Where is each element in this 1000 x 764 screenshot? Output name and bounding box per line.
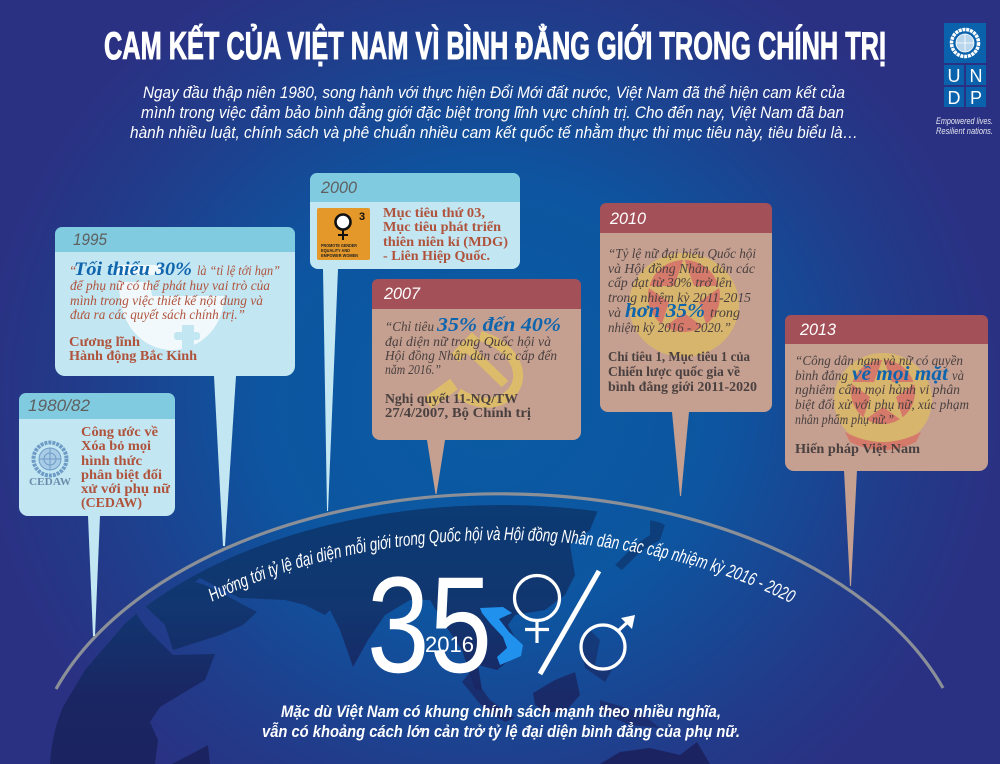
text: quote: trong nhiệm kỳ 2011-2015: [608, 290, 751, 305]
callout 2007: Resolution 11: năm 2016.”: [385, 362, 441, 377]
callout 1980/82: CEDAW: 1980/82: [28, 396, 91, 415]
intro text: hành nhiều luật, chính sách và phê chuẩn nhiều cam kết quốc tế nhằm thực thi mục tiêu này, tiêu biểu là…: [130, 123, 858, 142]
icon: watermark female symbol: [117, 265, 224, 355]
callout 2010: national strategy: hơn 35%: [625, 300, 705, 322]
icon: UN emblem: [34, 442, 66, 476]
callout 2000: MDG 3: 2000: [320, 178, 358, 197]
callout 1995: Beijing platform: 1995: [73, 230, 107, 249]
text: quote: nhiệm kỳ 2016 - 2020.”: [608, 320, 731, 335]
callout 2013: constitution: về mọi mặt: [852, 363, 950, 385]
text: quote: nhân phẩm phụ nữ.”: [795, 412, 894, 427]
text: CEDAW convention: Xóa bỏ mọi: [81, 438, 151, 453]
callout 2010: national strategy: 2010: [609, 209, 647, 228]
icon: Vietnam map: [480, 607, 523, 665]
text: CEDAW convention: Công ước về: [81, 424, 158, 439]
curved headline: Hướng tới tỷ lệ đại diện mỗi giới trong Quốc hội và Hội đồng Nhân dân các cấp nhiệm kỳ 2016 - 2020: [208, 526, 796, 602]
text: quote: [795, 353, 969, 427]
text: MDG goal: thiên niên kỉ (MDG): [383, 234, 508, 249]
icon: national emblem watermark: [629, 253, 739, 357]
text: quote: bình đẳng: [795, 368, 848, 383]
horizon arc: [56, 494, 943, 689]
intro text: mình trong việc đảm bảo bình đẳng giới đặc biệt trong lĩnh vực chính trị. Cho đến nay, Việt Nam đã ban: [141, 103, 844, 122]
icon: UN emblem: [952, 30, 978, 56]
intro text: Ngay đầu thập niên 1980, song hành với thực hiện Đổi Mới đất nước, Việt Nam đã thể hiện cam kết của: [143, 83, 845, 102]
callout 2010: national strategy: bình đẳng giới 2011-2020: [608, 379, 757, 394]
text: quote: trong: [710, 305, 740, 320]
text: CEDAW convention: xử với phụ nữ: [81, 481, 171, 496]
icon: MDG goal 3: PROMOTE GENDER: [321, 243, 358, 248]
text: MDG goal: [383, 205, 508, 263]
globe map: [40, 490, 710, 764]
text: source: Hiến pháp Việt Nam: [795, 441, 921, 456]
text: quote: “: [69, 263, 77, 278]
callout 2010: national strategy: Chiến lược quốc gia về: [608, 364, 740, 379]
text: MDG goal: Mục tiêu phát triển: [383, 219, 502, 234]
callout 1995: Beijing platform: đưa ra các quyết sách chính trị.”: [70, 307, 245, 322]
text: quote: nghiêm cấm mọi hành vi phân: [795, 382, 960, 397]
text: quote: [608, 246, 756, 335]
callout 1995: Beijing platform: để phụ nữ có thể phát huy vai trò của: [70, 278, 270, 293]
icon: MDG goal 3: [317, 208, 370, 260]
closing statement: vẫn có khoảng cách lớn cản trở tỷ lệ đại diện bình đẳng của phụ nữ.: [262, 721, 740, 741]
callout 2007: Resolution 11: đại diện nữ trong Quốc hội và: [385, 334, 551, 349]
text: source: Cương lĩnh: [69, 334, 141, 349]
UNDP logo: D: [948, 88, 960, 108]
callout 2013: constitution: [785, 315, 988, 586]
text: CEDAW convention: hình thức: [81, 453, 142, 468]
text: quote: biệt đối xử với phụ nữ, xúc phạm: [795, 397, 969, 412]
text: source: Nghị quyết 11-NQ/TW: [385, 391, 518, 406]
callout 1995: Beijing platform: [55, 227, 295, 546]
text: quote: “Chỉ tiêu: [385, 319, 434, 334]
callout 1995: Beijing platform: Tối thiểu 30%: [74, 259, 192, 280]
callout 2010: national strategy: [600, 203, 772, 496]
text: source: Chỉ tiêu 1, Mục tiêu 1 của: [608, 349, 750, 364]
year label 2016: 2016: [425, 632, 474, 657]
text: CEDAW convention: (CEDAW): [81, 495, 142, 510]
callout 1995: Beijing platform: Hành động Bắc Kinh: [69, 348, 198, 363]
UNDP logo: U: [948, 66, 960, 86]
callout 2007: Resolution 11: Hội đồng Nhân dân các cấp đến: [384, 348, 557, 363]
icon: male symbol: [581, 615, 635, 669]
text: quote: và: [952, 368, 964, 383]
callout 2007: Resolution 11: [372, 279, 581, 494]
callout 1995: Beijing platform: là “tỉ lệ tới hạn”: [197, 263, 280, 278]
callout 2007: Resolution 11: 27/4/2007, Bộ Chính trị: [385, 405, 531, 420]
text: CEDAW convention: phân biệt đối: [81, 467, 162, 482]
text: quote: và: [608, 305, 621, 320]
closing statement: Mặc dù Việt Nam có khung chính sách mạnh theo nhiều nghĩa,: [281, 702, 721, 721]
text: MDG goal: - Liên Hiệp Quốc.: [383, 248, 490, 263]
big figure 35: 35: [367, 549, 492, 702]
text: MDG goal: Mục tiêu thứ 03,: [383, 205, 485, 220]
UNDP logo: [936, 23, 993, 136]
text: quote: “Tỷ lệ nữ đại biểu Quốc hội: [608, 246, 756, 261]
icon: MDG goal 3: 3: [359, 211, 365, 223]
text: CEDAW convention: [81, 424, 171, 510]
percent slash: [540, 571, 599, 674]
text: quote: “Công dân nam và nữ có quyền: [795, 353, 963, 368]
callout 1995: Beijing platform: mình trong việc thiết kế nội dung và: [70, 293, 263, 308]
UNDP logo: N: [970, 66, 982, 86]
icon: MDG goal 3: EQUALITY AND: [321, 248, 351, 253]
text: quote: và Hội đồng Nhân dân các: [608, 261, 755, 276]
UNDP logo: P: [970, 88, 982, 108]
callout 1980/82: CEDAW: CEDAW: [29, 476, 71, 488]
callout 2007: Resolution 11: 35% đến 40%: [436, 314, 561, 336]
icon: national emblem watermark: [834, 353, 932, 450]
icon: female symbol: [514, 576, 560, 643]
closing statement: [262, 702, 740, 741]
callout 1980/82: CEDAW: [19, 393, 175, 636]
icon: hammer and sickle watermark: [428, 336, 518, 403]
callout 2000: MDG 3: [310, 173, 520, 511]
intro text: [130, 83, 858, 142]
callout 2013: constitution: 2013: [799, 320, 837, 339]
icon: MDG goal 3: EMPOWER WOMEN: [321, 253, 359, 258]
text: quote: cấp đạt từ 30% trở lên: [608, 275, 732, 290]
callout 2007: Resolution 11: 2007: [383, 284, 421, 303]
